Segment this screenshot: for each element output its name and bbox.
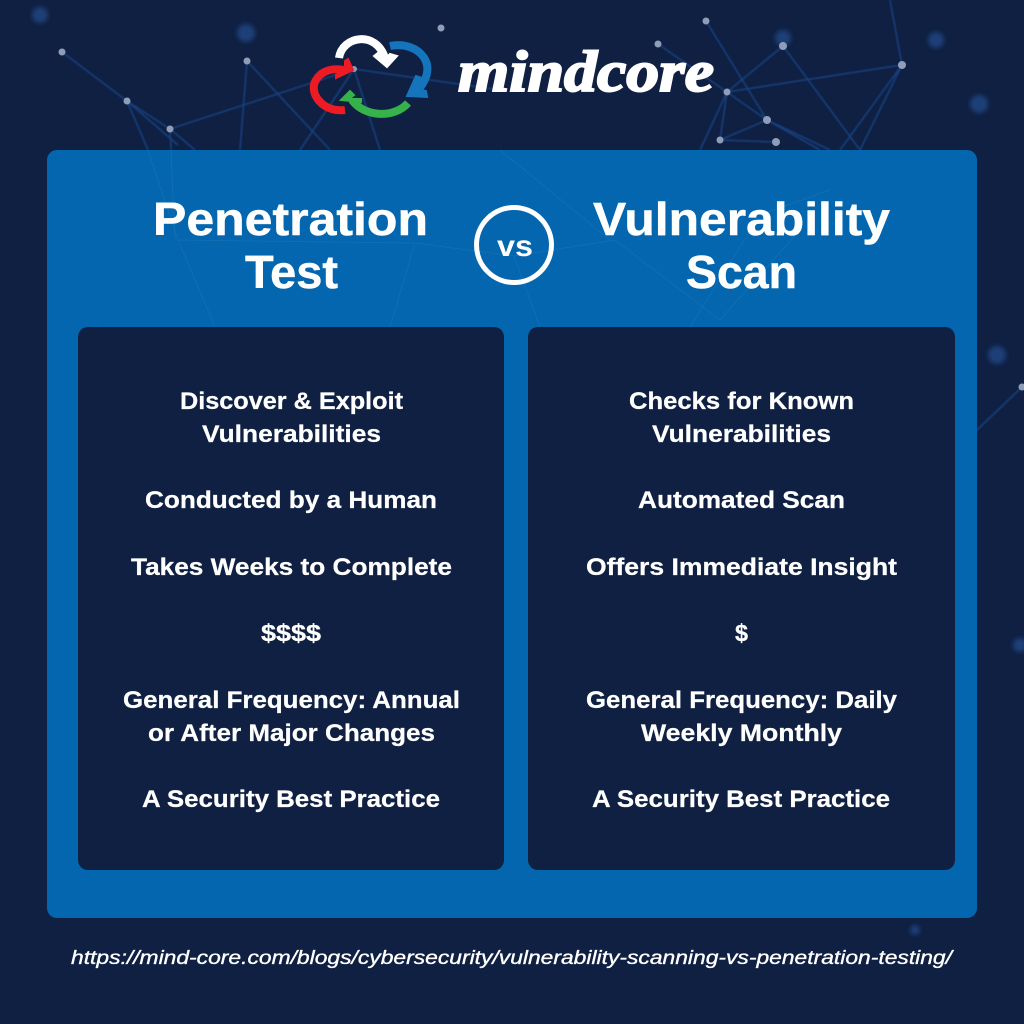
heading: Penetration Test xyxy=(153,193,428,298)
wordmark: mindcore xyxy=(458,39,714,104)
panel: penetration test list: Vulnerabilities xyxy=(202,421,381,448)
panel: penetration test list: Conducted by a Human xyxy=(145,487,437,514)
panel: vulnerability scan list: Checks for Known xyxy=(629,388,854,415)
logo: mindcore xyxy=(314,39,714,114)
panel: penetration test list xyxy=(78,327,504,870)
heading: Vulnerability Scan: Vulnerability xyxy=(593,193,890,245)
panel: vulnerability scan list: Weekly Monthly xyxy=(641,720,843,747)
panel: vulnerability scan list: Offers Immediate Insight xyxy=(586,554,897,581)
panel: penetration test list: $$$$ xyxy=(261,620,322,647)
vs badge xyxy=(476,208,552,282)
panel: vulnerability scan list: Vulnerabilities xyxy=(652,421,831,448)
panel: vulnerability scan list: Automated Scan xyxy=(638,487,845,514)
panel: penetration test list: Discover & Exploit xyxy=(180,388,403,415)
panel: vulnerability scan list xyxy=(528,327,955,870)
panel: vulnerability scan list: A Security Best Practice xyxy=(592,786,890,813)
panel: penetration test list: or After Major Changes xyxy=(148,720,435,747)
heading: Vulnerability Scan: Scan xyxy=(686,246,797,298)
heading: Penetration Test: Penetration xyxy=(153,193,428,245)
heading: Vulnerability Scan xyxy=(593,193,890,298)
panel: penetration test list: Takes Weeks to Complete xyxy=(131,554,452,581)
icon: recycling cloud arrows xyxy=(314,39,427,114)
source url: https://mind-core.com/blogs/cybersecurity/vulnerability-scanning-vs-penetration-testing/ xyxy=(71,947,955,969)
vs badge: vs xyxy=(497,230,533,263)
panel: penetration test list: General Frequency: Annual xyxy=(123,687,460,714)
panel: penetration test list: A Security Best Practice xyxy=(142,786,440,813)
panel: vulnerability scan list: $ xyxy=(735,620,749,647)
panel: comparison card xyxy=(47,150,977,918)
panel: vulnerability scan list: General Frequency: Daily xyxy=(586,687,898,714)
heading: Penetration Test: Test xyxy=(245,246,338,298)
